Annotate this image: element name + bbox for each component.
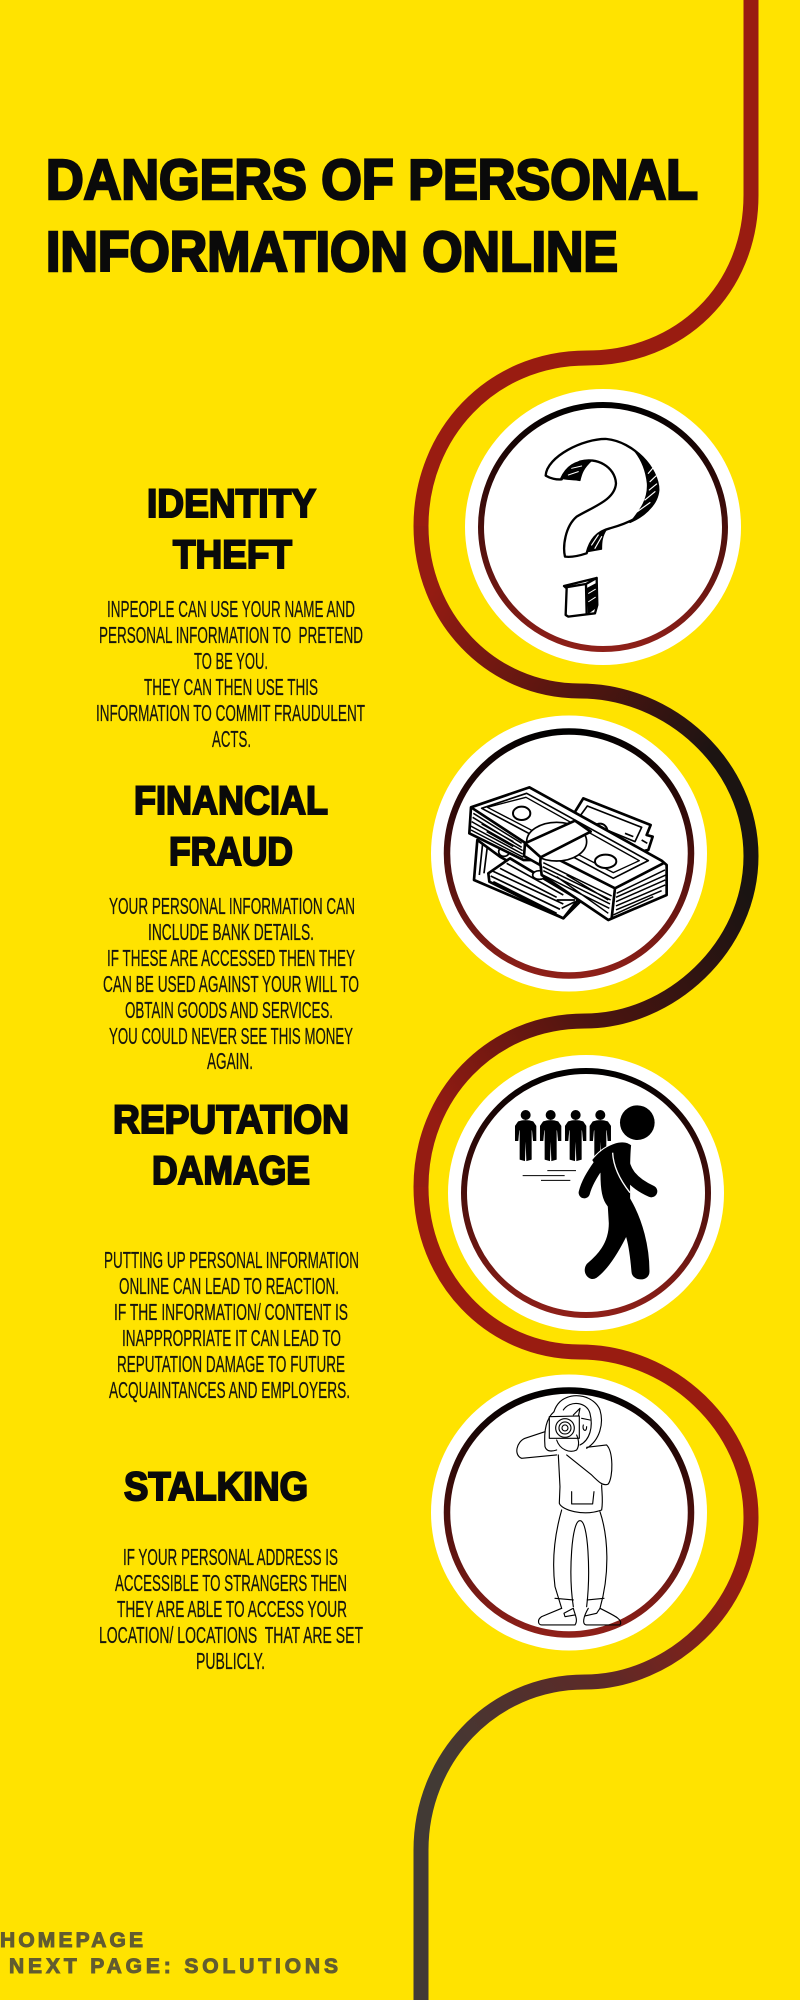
panel: identity theft: [96, 482, 365, 752]
heading: reputation damage: REPUTATION: [113, 1098, 349, 1142]
heading: identity theft: [147, 482, 316, 577]
icon: question mark: [546, 439, 658, 617]
text block: reputation damage: ONLINE CAN LEAD TO REACTION.: [119, 1273, 339, 1299]
text block: reputation damage: IF THE INFORMATION/ CONTENT IS: [114, 1299, 348, 1325]
title: INFORMATION ONLINE: [46, 220, 618, 284]
heading: financial fraud: FINANCIAL: [134, 779, 328, 823]
text block: financial fraud: [103, 893, 359, 1074]
panel: question mark circle: [465, 389, 741, 665]
footer navigation: [0, 1929, 338, 1978]
heading: reputation damage: DAMAGE: [152, 1149, 310, 1193]
panel: financial fraud: [103, 779, 359, 1074]
text block: stalking: THEY ARE ABLE TO ACCESS YOUR: [117, 1596, 347, 1622]
text block: identity theft: THEY CAN THEN USE THIS: [144, 674, 318, 700]
text block: stalking: IF YOUR PERSONAL ADDRESS IS: [123, 1544, 338, 1570]
text block: financial fraud: CAN BE USED AGAINST YOUR WILL TO: [103, 971, 359, 997]
heading: reputation damage: [113, 1098, 349, 1193]
text block: stalking: [99, 1544, 363, 1674]
icon: banknote bundles: [469, 787, 667, 920]
text block: identity theft: TO BE YOU.: [194, 648, 268, 674]
panel: reputation damage: [104, 1098, 359, 1403]
panel: stalking: [99, 1465, 363, 1674]
text block: identity theft: INFORMATION TO COMMIT FRAUDULENT: [96, 700, 365, 726]
text block: financial fraud: AGAIN.: [207, 1048, 253, 1074]
icon: group of four people: [515, 1110, 611, 1161]
heading: identity theft: THEFT: [173, 533, 292, 577]
heading: financial fraud: FRAUD: [169, 830, 293, 874]
panel: money circle: [431, 716, 707, 992]
footer navigation: NEXT PAGE: SOLUTIONS: [9, 1955, 338, 1978]
text block: reputation damage: INAPPROPRIATE IT CAN LEAD TO: [122, 1325, 341, 1351]
footer navigation: HOMEPAGE: [0, 1929, 143, 1952]
title: [46, 148, 698, 284]
title: DANGERS OF PERSONAL: [46, 148, 698, 212]
icon: person walking away from group: [515, 1105, 655, 1280]
text block: stalking: PUBLICLY.: [196, 1648, 265, 1674]
text block: identity theft: ACTS.: [212, 726, 251, 752]
text block: financial fraud: YOUR PERSONAL INFORMATION CAN: [109, 893, 355, 919]
text block: identity theft: INPEOPLE CAN USE YOUR NAME AND: [107, 596, 355, 622]
text block: financial fraud: INCLUDE BANK DETAILS.: [148, 919, 314, 945]
text block: stalking: LOCATION/ LOCATIONS THAT ARE SET: [99, 1622, 363, 1648]
heading: financial fraud: [134, 779, 328, 874]
text block: stalking: ACCESSIBLE TO STRANGERS THEN: [115, 1570, 347, 1596]
text block: financial fraud: IF THESE ARE ACCESSED THEN THEY: [107, 945, 355, 971]
heading: stalking: STALKING: [124, 1465, 308, 1509]
text block: reputation damage: ACQUAINTANCES AND EMPLOYERS.: [109, 1377, 350, 1403]
text block: financial fraud: YOU COULD NEVER SEE THIS MONEY: [109, 1023, 353, 1049]
heading: identity theft: IDENTITY: [147, 482, 316, 526]
winding path line: [421, 0, 751, 2000]
panel: photographer circle: [431, 1374, 707, 1650]
text block: identity theft: [96, 596, 365, 752]
icon: photographer outline: [517, 1396, 621, 1625]
text block: reputation damage: PUTTING UP PERSONAL INFORMATION: [104, 1247, 359, 1273]
text block: identity theft: PERSONAL INFORMATION TO PRETEND: [99, 622, 363, 648]
text block: reputation damage: [104, 1247, 359, 1403]
text block: financial fraud: OBTAIN GOODS AND SERVICES.: [125, 997, 333, 1023]
text block: reputation damage: REPUTATION DAMAGE TO FUTURE: [117, 1351, 345, 1377]
panel: walking person circle: [448, 1055, 724, 1331]
